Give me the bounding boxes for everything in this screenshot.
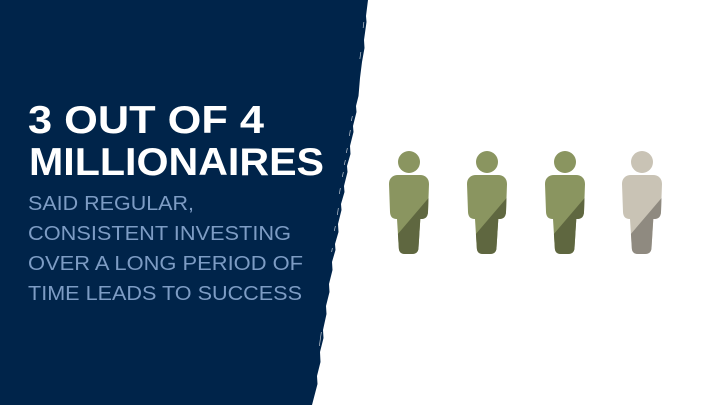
panel: navy brush background (0, 0, 368, 405)
icon: person 1 (389, 151, 429, 254)
title: 3 OUT OF 4 (28, 99, 264, 142)
subtitle text (28, 192, 303, 305)
subtitle text: OVER A LONG PERIOD OF (28, 252, 303, 275)
icon: person 3 (545, 151, 585, 254)
subtitle text: TIME LEADS TO SUCCESS (28, 282, 302, 305)
subtitle text: SAID REGULAR, (28, 192, 194, 215)
title (28, 99, 324, 184)
icon: person 2 (467, 151, 507, 254)
icon: person 4 (622, 151, 662, 254)
subtitle text: CONSISTENT INVESTING (28, 222, 291, 245)
title: MILLIONAIRES (29, 141, 324, 184)
brush specks (319, 22, 364, 346)
